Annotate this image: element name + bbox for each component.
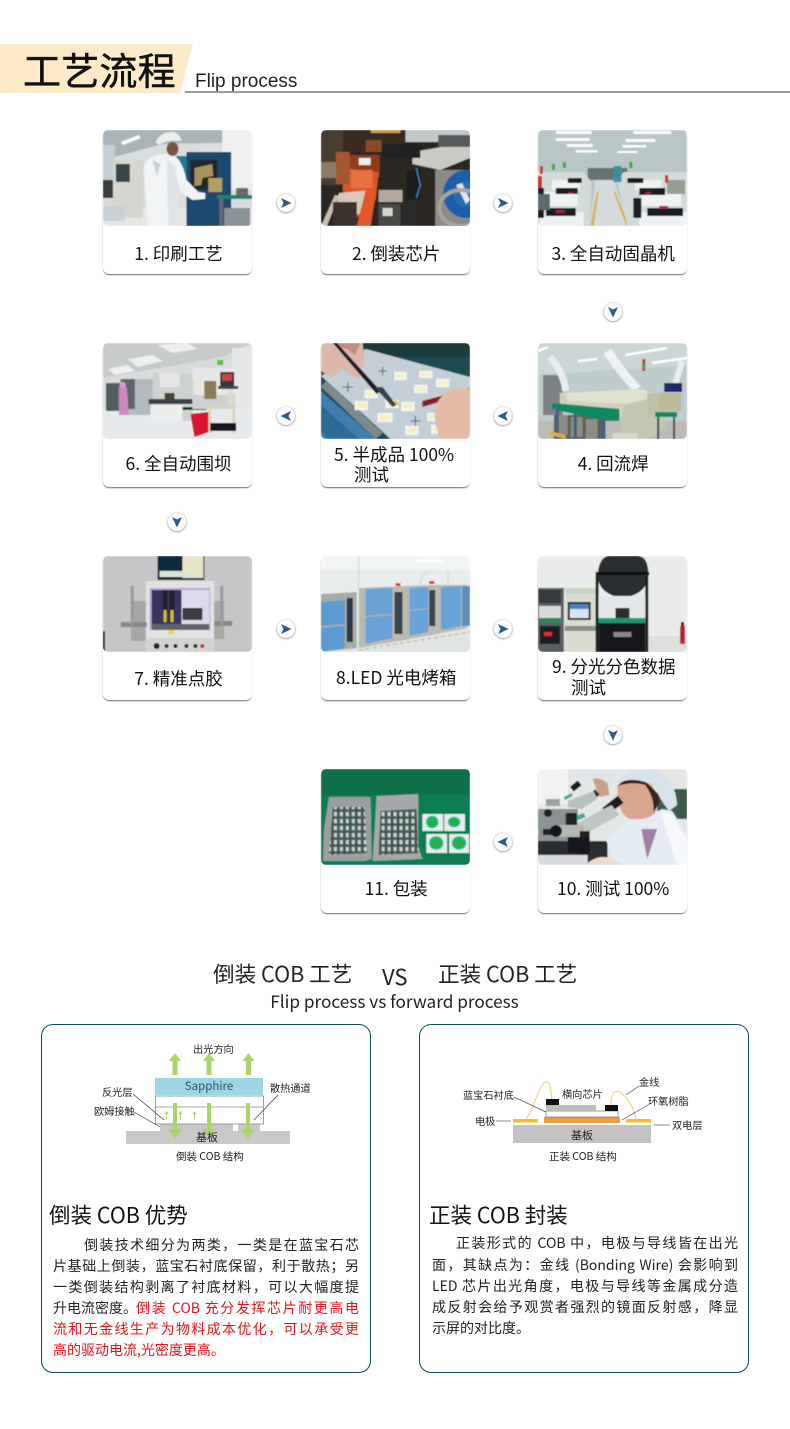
step 3 card <box>538 130 687 274</box>
arrow 9 to 10 <box>604 726 622 744</box>
step 9 card <box>538 556 687 700</box>
panel: forward COB packaging <box>419 1024 749 1373</box>
text block: forward description: LED 芯片出光角度，电极与导线等金属成分造 <box>432 1276 738 1296</box>
diagram: flip COB structure: Sapphire <box>185 1078 233 1094</box>
label: 11. 包装 <box>365 876 428 901</box>
photo: reflow oven <box>538 343 687 439</box>
diagram: forward COB structure: 横向芯片 <box>562 1086 603 1101</box>
diagram: forward COB structure: 金线 <box>639 1074 659 1089</box>
photo: LED testing tray <box>321 343 470 439</box>
text block: flip description: 倒装技术细分为两类，一类是在蓝宝石芯 <box>84 1235 359 1255</box>
diagram: forward COB structure: 环氧树脂 <box>648 1093 689 1108</box>
text block: flip description: 升电流密度。 <box>53 1298 137 1318</box>
step 10 card <box>538 769 687 913</box>
step 1 card <box>103 130 252 274</box>
banner background shape <box>0 44 790 93</box>
heading: forward COB: 正装 COB 封装 <box>429 1199 568 1230</box>
text block: forward description: 正装形式的 COB 中，电极与导线皆在出光 <box>456 1233 738 1253</box>
flip COB title: 倒装 COB 工艺 <box>213 958 352 989</box>
comparison heading <box>213 958 577 1013</box>
arrow 7 to 8 <box>277 620 295 638</box>
label: 7. 精准点胶 <box>134 666 223 691</box>
label: 10. 测试 100% <box>557 876 669 901</box>
diagram: forward COB structure: 蓝宝石衬底 <box>463 1087 514 1102</box>
label: 4. 回流焊 <box>578 451 649 476</box>
text block: flip description: 流和无金线生产为物料成本优化，可以承受更 <box>53 1319 359 1339</box>
label: 8.LED 光电烤箱 <box>336 665 456 690</box>
text block: flip description <box>53 1235 359 1360</box>
photo: die bonder workshop <box>538 130 687 226</box>
label: 测试 <box>571 675 606 700</box>
photo: spectrometer and sphere <box>538 556 687 652</box>
diagram: flip COB structure: 出光方向 <box>193 1041 234 1056</box>
photo: printing machine and operator <box>103 130 252 226</box>
diagram: forward COB structure: 电极 <box>475 1113 495 1128</box>
arrow 6 to 7 <box>168 513 186 531</box>
step 4 card <box>538 343 687 487</box>
label <box>552 654 675 700</box>
photo: microscope inspection workers <box>538 769 687 865</box>
arrow 8 to 9 <box>494 620 512 638</box>
panel: flip COB advantages <box>41 1024 371 1373</box>
text block: forward description <box>432 1233 738 1338</box>
step 8 card <box>321 556 470 700</box>
text block: flip description: 一类倒装结构剥离了衬底材料，可以大幅度提 <box>53 1277 359 1297</box>
heading: process title: 工艺流程 <box>23 41 176 96</box>
arrow 1 to 2 <box>277 194 295 212</box>
forward COB title: 正装 COB 工艺 <box>438 958 577 989</box>
arrow 3 to 4 <box>604 303 622 321</box>
diagram: forward COB structure: 正装 COB 结构 <box>549 1149 617 1164</box>
text block: flip description: 倒装 COB 充分发挥芯片耐更高电 <box>136 1298 359 1318</box>
diagram: forward COB structure <box>463 1074 703 1164</box>
text block: forward description: 面，其缺点为：金线 (Bonding Wire) 会影响到 <box>432 1254 738 1274</box>
photo: automatic dam machine <box>103 343 252 439</box>
text block: forward description: 示屏的对比度。 <box>432 1318 530 1338</box>
label: 5. 半成品 100% <box>334 442 454 466</box>
diagram: flip COB structure: 反光层 <box>102 1084 133 1099</box>
label <box>334 442 454 486</box>
arrow 10 to 11 <box>494 833 512 851</box>
label: 6. 全自动围坝 <box>126 451 232 476</box>
step 2 card <box>321 130 470 274</box>
photo: LED aging ovens <box>321 556 470 652</box>
comparison subtitle: Flip process vs forward process <box>270 988 519 1013</box>
label: 1. 印刷工艺 <box>134 241 223 266</box>
photo: flip chip machine <box>321 130 470 226</box>
step 6 card <box>103 343 252 487</box>
label: 测试 <box>354 462 389 486</box>
diagram: flip COB structure: 倒装 COB 结构 <box>176 1149 244 1164</box>
label: 2. 倒装芯片 <box>352 241 440 266</box>
header: title banner <box>0 41 790 96</box>
text block: flip description: 高的驱动电流,光密度更高。 <box>53 1340 225 1360</box>
step 7 card <box>103 556 252 700</box>
arrow 2 to 3 <box>494 194 512 212</box>
subtitle: Flip process: Flip process <box>195 71 297 92</box>
arrow 5 to 6 <box>277 407 295 425</box>
photo: dispensing machine <box>103 556 252 652</box>
diagram: flip COB structure <box>94 1041 311 1164</box>
label: 3. 全自动固晶机 <box>551 241 675 266</box>
step 5 card <box>321 343 470 487</box>
step 11 card <box>321 769 470 913</box>
diagram: flip COB structure: 欧姆接触 <box>94 1103 135 1118</box>
text block: forward description: 成反射会给予观赏者强烈的镜面反射感，降显 <box>432 1297 738 1317</box>
VS mark: VS <box>382 960 408 992</box>
photo: vacuum packaging on green table <box>321 769 470 865</box>
diagram: flip COB structure: 基板 <box>196 1129 218 1145</box>
diagram: flip COB structure: 散热通道 <box>270 1080 311 1095</box>
label: 9. 分光分色数据 <box>552 654 675 679</box>
text block: flip description: 片基础上倒装，蓝宝石衬底保留，利于散热；另 <box>53 1256 359 1276</box>
arrow 4 to 5 <box>494 407 512 425</box>
diagram: forward COB structure: 双电层 <box>672 1117 703 1132</box>
diagram: forward COB structure: 基板 <box>571 1127 593 1143</box>
heading: flip advantages: 倒装 COB 优势 <box>49 1199 188 1230</box>
